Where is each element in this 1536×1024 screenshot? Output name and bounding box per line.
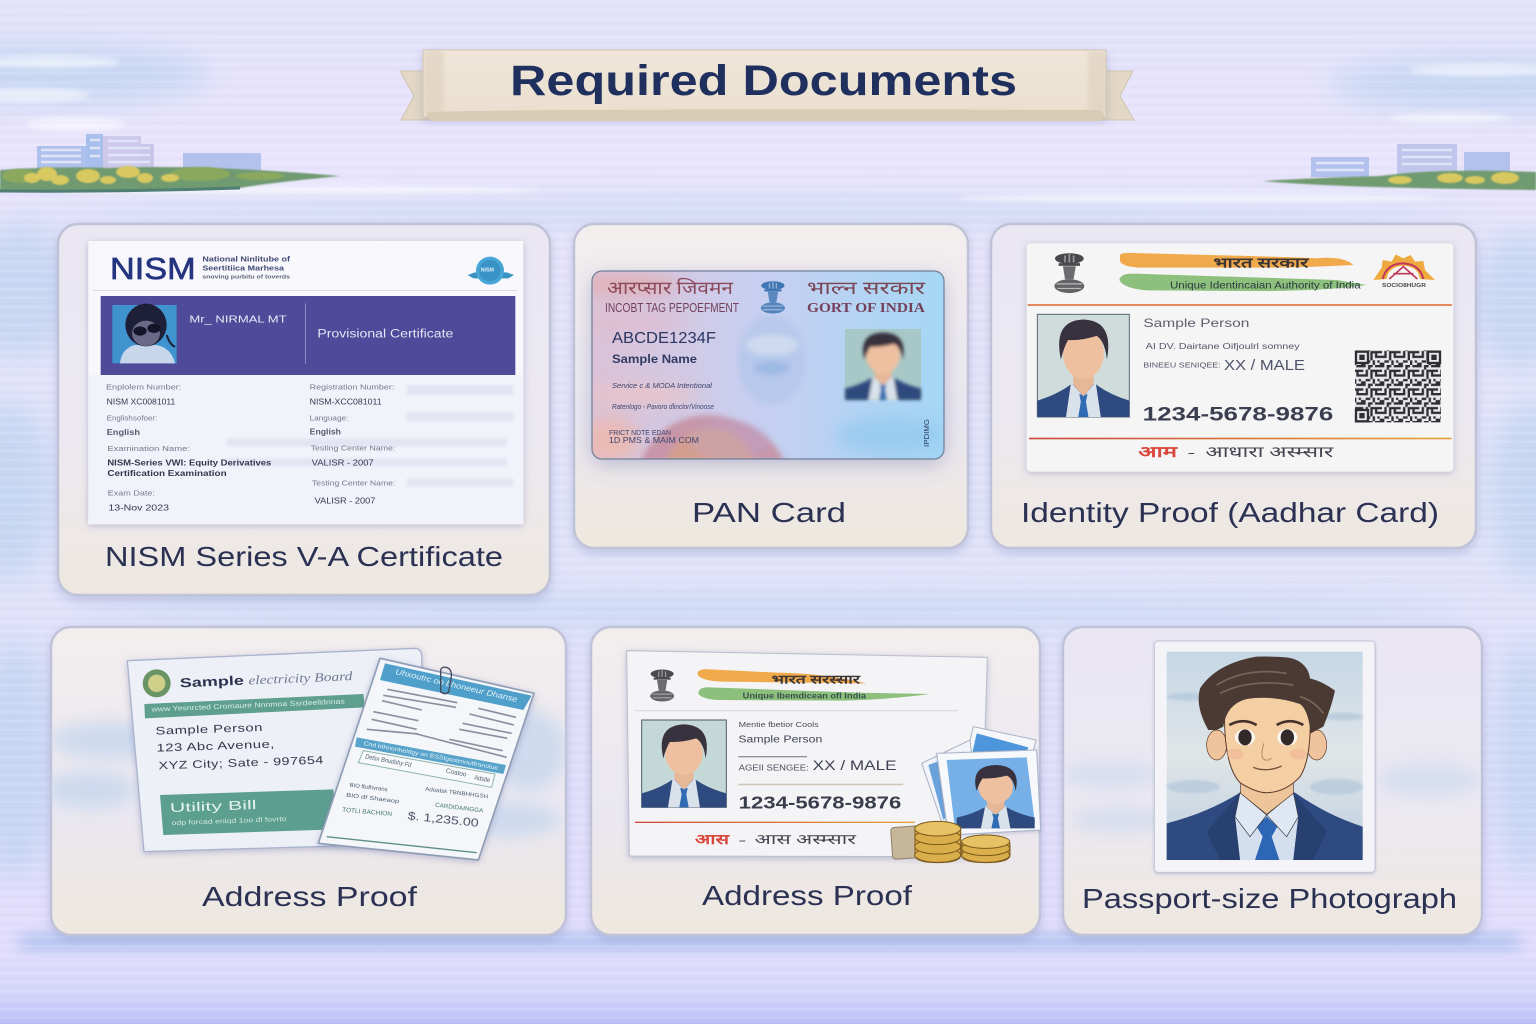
certificate document: Mr_ NIRMAL MT (189, 314, 287, 325)
label: Identity Proof: Identity Proof (Aadhar Card) (1021, 497, 1439, 528)
utility bill and invoice: TOTLI BACHION (342, 807, 393, 818)
utility bill and invoice: 123 Abc Avenue, (156, 739, 275, 755)
QR code (1355, 350, 1441, 422)
panel: Address proof utility bill (45, 627, 566, 935)
ID photo (1037, 314, 1129, 417)
certificate document: Language: (310, 413, 348, 422)
certificate document: Provisional Certificate (317, 327, 454, 341)
Aadhaar card document: AI DV. Dairtane Oifjoulrl somney (1146, 341, 1300, 351)
Aadhaar card document: 1234-5678-9876 (1143, 404, 1333, 426)
certificate document: VALISR - 2007 (315, 496, 376, 505)
utility bill and invoice: Coatoo (445, 768, 467, 779)
panel: Passport photograph (1060, 627, 1482, 935)
certificate document (88, 241, 523, 524)
Aadhaar card with photos and coins (627, 651, 1041, 863)
Aadhaar card document (1027, 243, 1453, 472)
scenery: right skyline and trees (1262, 144, 1536, 190)
PAN photo (845, 329, 921, 400)
Hindi heading right: भाल्न सरकार (807, 278, 926, 298)
PAN card document: Service c & MODA Intentional (612, 381, 712, 390)
certificate document: NISM-Series VWI: Equity Derivatives (107, 459, 272, 468)
PAN card document: ABCDE1234F (612, 330, 716, 347)
Aadhaar card with photos and coins: Sample Person (738, 734, 822, 745)
certificate document: NISM XC0081011 (107, 398, 176, 407)
panel: PAN card (574, 224, 968, 548)
certificate document: NISM (481, 267, 495, 273)
utility bill and invoice: BIO df Shaeaop (346, 793, 399, 805)
invoice (318, 658, 534, 860)
Aadhaar card document: - (1187, 445, 1195, 460)
label: NISM Series V-A Certificate: NISM Series V-A Certificate (105, 541, 503, 572)
sun logo (1373, 254, 1435, 289)
Aadhaar card with photos and coins: 1234-5678-9876 (739, 793, 902, 813)
PAN card document: 1D PMS & MAIM COM (609, 436, 699, 445)
utility bill and invoice: Detsx Bnudohy Fd (365, 753, 412, 769)
ID photo (642, 720, 726, 807)
certificate document: NISM-XCC081011 (310, 398, 382, 407)
certificate document: snoving purbitu of toverds (202, 274, 290, 280)
Aadhaar card with photos and coins: Unique Ibemdicean ofl India (743, 692, 867, 701)
Aadhaar card document: BINEEU SENIQEE: (1143, 361, 1221, 370)
utility bill and invoice: Utility Bill (170, 798, 257, 815)
Aadhaar card with photos and coins: XX / MALE (813, 757, 897, 773)
Aadhaar card document: आम (1138, 444, 1178, 461)
certificate document: Enplolem Number: (106, 383, 181, 392)
PAN card document: GORT OF INDIA (807, 300, 925, 315)
utility bill and invoice: Adoalsk TBNBHHGSH (425, 787, 488, 800)
utility bill and invoice: Cnd bthnonheldgy on ESSIgsotrnnutfranolue (363, 741, 498, 772)
stacked photos (922, 727, 1041, 835)
Aadhaar card with photos and coins: - (738, 833, 746, 847)
certificate document: Testing Center Name: (312, 478, 395, 487)
panel: Address proof Aadhaar (591, 627, 1041, 935)
certificate document: NISM (110, 252, 196, 286)
label: Address Proof: Address Proof (202, 881, 417, 912)
paper clip (441, 667, 451, 694)
passport photo (1154, 641, 1375, 872)
utility bill and invoice: BIO fbdhvrans (349, 783, 388, 793)
utility bill and invoice: Uhxoutrc oo bhoneeur Dhanse (395, 667, 519, 704)
utility bill and invoice: XYZ City; Sate - 997654 (158, 755, 324, 772)
Hindi heading left: आरप्सार जिवमन (607, 277, 734, 298)
utility bill and invoice: $. 1,235.00 (407, 810, 479, 830)
label: PAN Card: PAN Card (692, 497, 846, 528)
Aadhaar card with photos and coins: AGEII SENGEE: (739, 763, 809, 772)
panel: Identity proof (991, 224, 1476, 548)
certificate document: VALISR - 2007 (312, 459, 374, 468)
PAN card document: INCOBT TAG PEPOEFMENT (605, 301, 739, 315)
utility bill and invoice: CARDIDAINGGA (435, 803, 483, 815)
emblem (1054, 253, 1084, 293)
Aadhaar card document: Sample Person (1143, 317, 1249, 330)
Aadhaar card with photos and coins: भारत सरस्सार (772, 672, 862, 686)
utility bill and invoice: electricity Board (248, 669, 353, 687)
Aadhaar card with photos and coins: आस अस्म्सार (755, 833, 856, 848)
title: Required Documents (510, 57, 1017, 105)
Aadhaar card with photos and coins: Mentie fbetior Cools (739, 722, 819, 729)
national emblem (761, 281, 785, 313)
coins and wallet (891, 821, 1010, 863)
PAN card document (580, 271, 945, 462)
certificate document: Certification Examination (107, 469, 227, 478)
PAN card document: Ratenlogo - Pavoro dlinclor/Vinoose (612, 402, 714, 411)
scenery: left skyline and trees (0, 134, 340, 192)
utility bill and invoice: www Yesnrcted Cromaure Nnnmoa Ssrdeelldnnas (150, 699, 346, 714)
label: Address Proof: Address Proof (702, 880, 912, 911)
utility bill and invoice: Sample (180, 673, 244, 690)
certificate document: Seertitiica Marhesa (202, 263, 285, 272)
utility bill and invoice: Adstle (474, 774, 491, 784)
panel: NISM certificate (58, 224, 550, 595)
utility bill and invoice: odp forcad enlqd 1oo dl fovrto (171, 816, 287, 827)
certificate document: English (310, 428, 341, 437)
PAN card document: IPDIMG (924, 419, 931, 447)
Aadhaar card document: भारत सरकार (1213, 256, 1310, 271)
Aadhaar card document: XX / MALE (1224, 358, 1305, 374)
utility bill and invoice: Sample Person (155, 722, 263, 738)
title banner (400, 50, 1134, 121)
PAN card document: Sample Name (612, 354, 697, 366)
Aadhaar card document: Unique Identincaian Authority of India (1170, 280, 1361, 291)
certificate document: Examination Name: (107, 444, 190, 453)
certificate document: Exam Date: (108, 489, 155, 498)
PAN card document: FRICT NDTE EDAN (609, 430, 671, 437)
certificate document: Testing Center Name: (311, 444, 395, 453)
certificate document: Registration Number: (310, 383, 394, 392)
utility bill and invoice (127, 648, 534, 860)
certificate document: 13-Nov 2023 (108, 504, 170, 513)
tricolour brush strokes (1120, 253, 1353, 268)
label: Passport-size Photograph: Passport-size Photograph (1082, 883, 1457, 914)
certificate document: Englishsofoer: (107, 413, 157, 422)
sun logo: SOCIO8HUGR (1382, 283, 1426, 289)
Aadhaar card with photos and coins: आस (695, 833, 730, 848)
certificate photo (112, 304, 177, 363)
certificate document: National Ninlitube of (202, 255, 291, 264)
Aadhaar card document: आधारा अस्म्सार (1205, 444, 1334, 461)
certificate document: English (107, 428, 140, 437)
